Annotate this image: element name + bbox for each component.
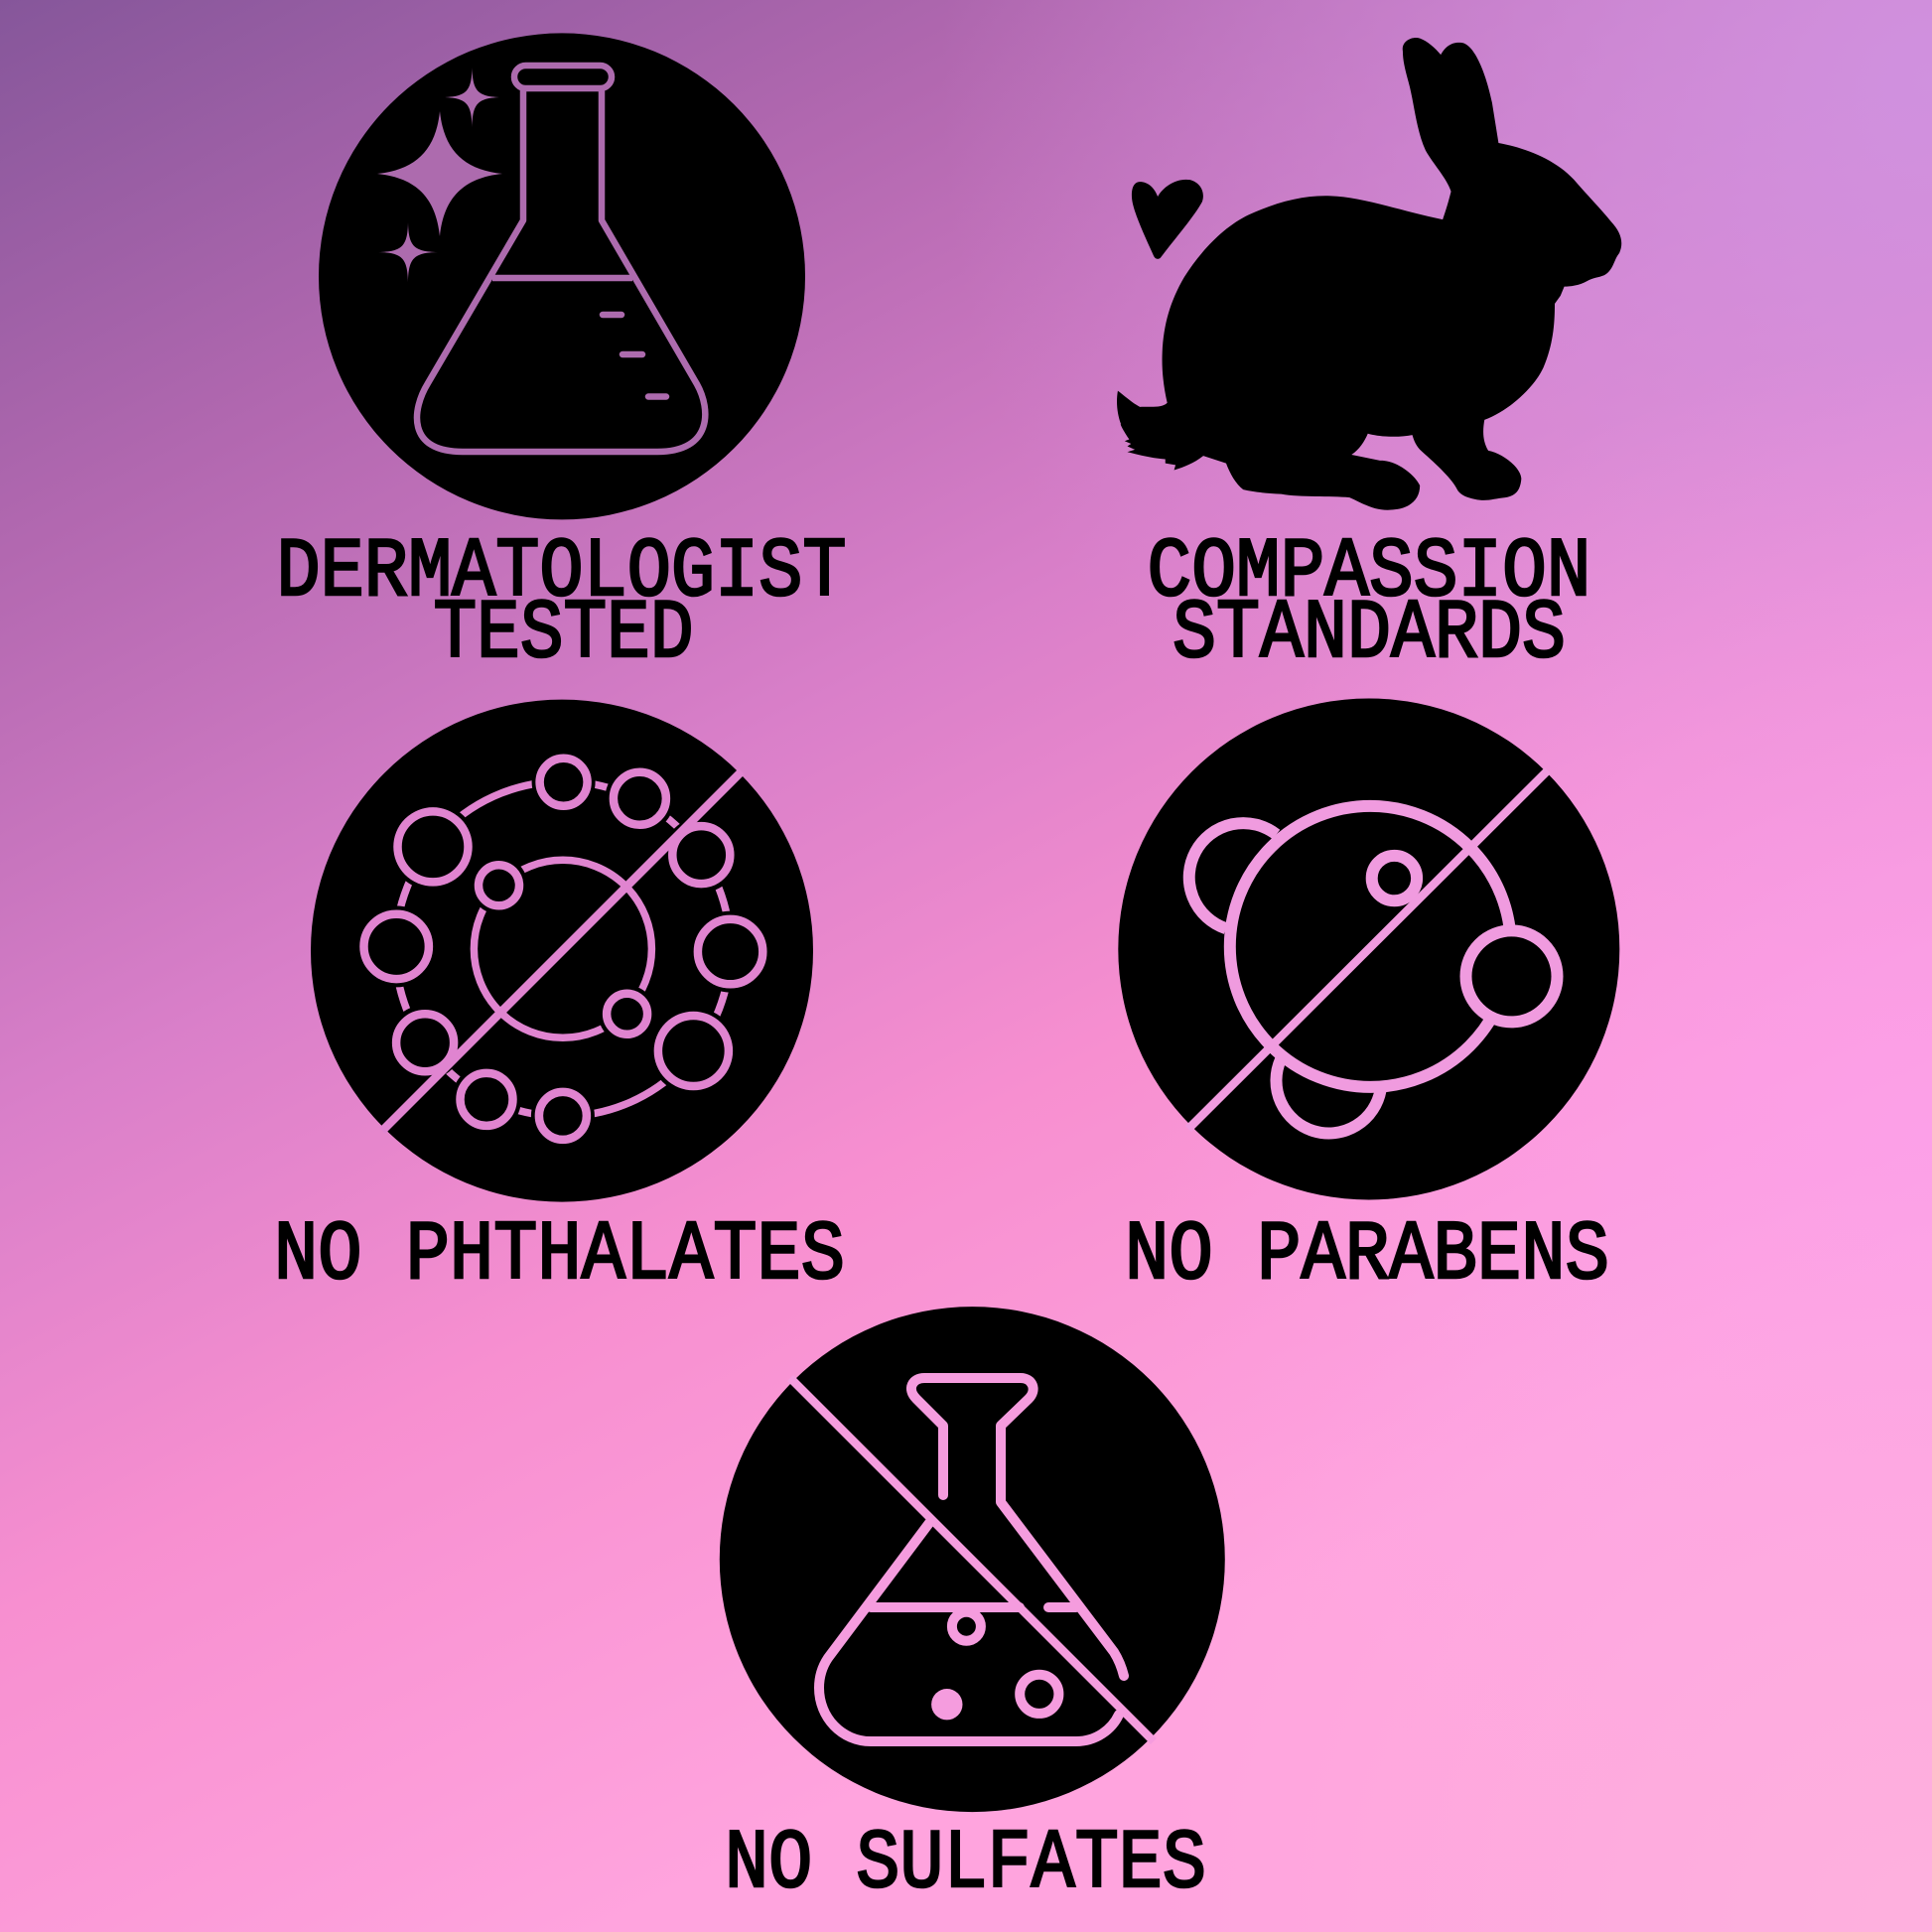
icon: crossed-out molecule [1118,699,1619,1199]
heading: dermatologist tested [276,526,846,682]
heading: compassion standards [1148,526,1590,682]
icon: rabbit with heart [1117,38,1621,510]
heading: compassion standards: STANDARDS [1173,588,1566,682]
heading: dermatologist tested: DERMATOLOGIST [276,526,846,621]
icon: crossed-out flask [720,1307,1225,1812]
panel: compassion standards [1117,38,1621,682]
heading: no parabens: NO PARABENS [1125,1209,1609,1304]
icon: flask with sparkles [319,33,805,519]
panel: dermatologist tested [276,33,846,682]
heading: no phthalates: NO PHTHALATES [274,1209,845,1304]
panel: no phthalates [274,700,845,1304]
panel: no parabens [1118,699,1619,1304]
heading: dermatologist tested: TESTED [433,588,693,682]
panel: no sulfates [720,1307,1225,1912]
heading: no sulfates: NO SULFATES [725,1818,1206,1912]
icon: crossed-out molecule ring [311,700,813,1202]
heading: compassion standards: COMPASSION [1148,526,1590,621]
